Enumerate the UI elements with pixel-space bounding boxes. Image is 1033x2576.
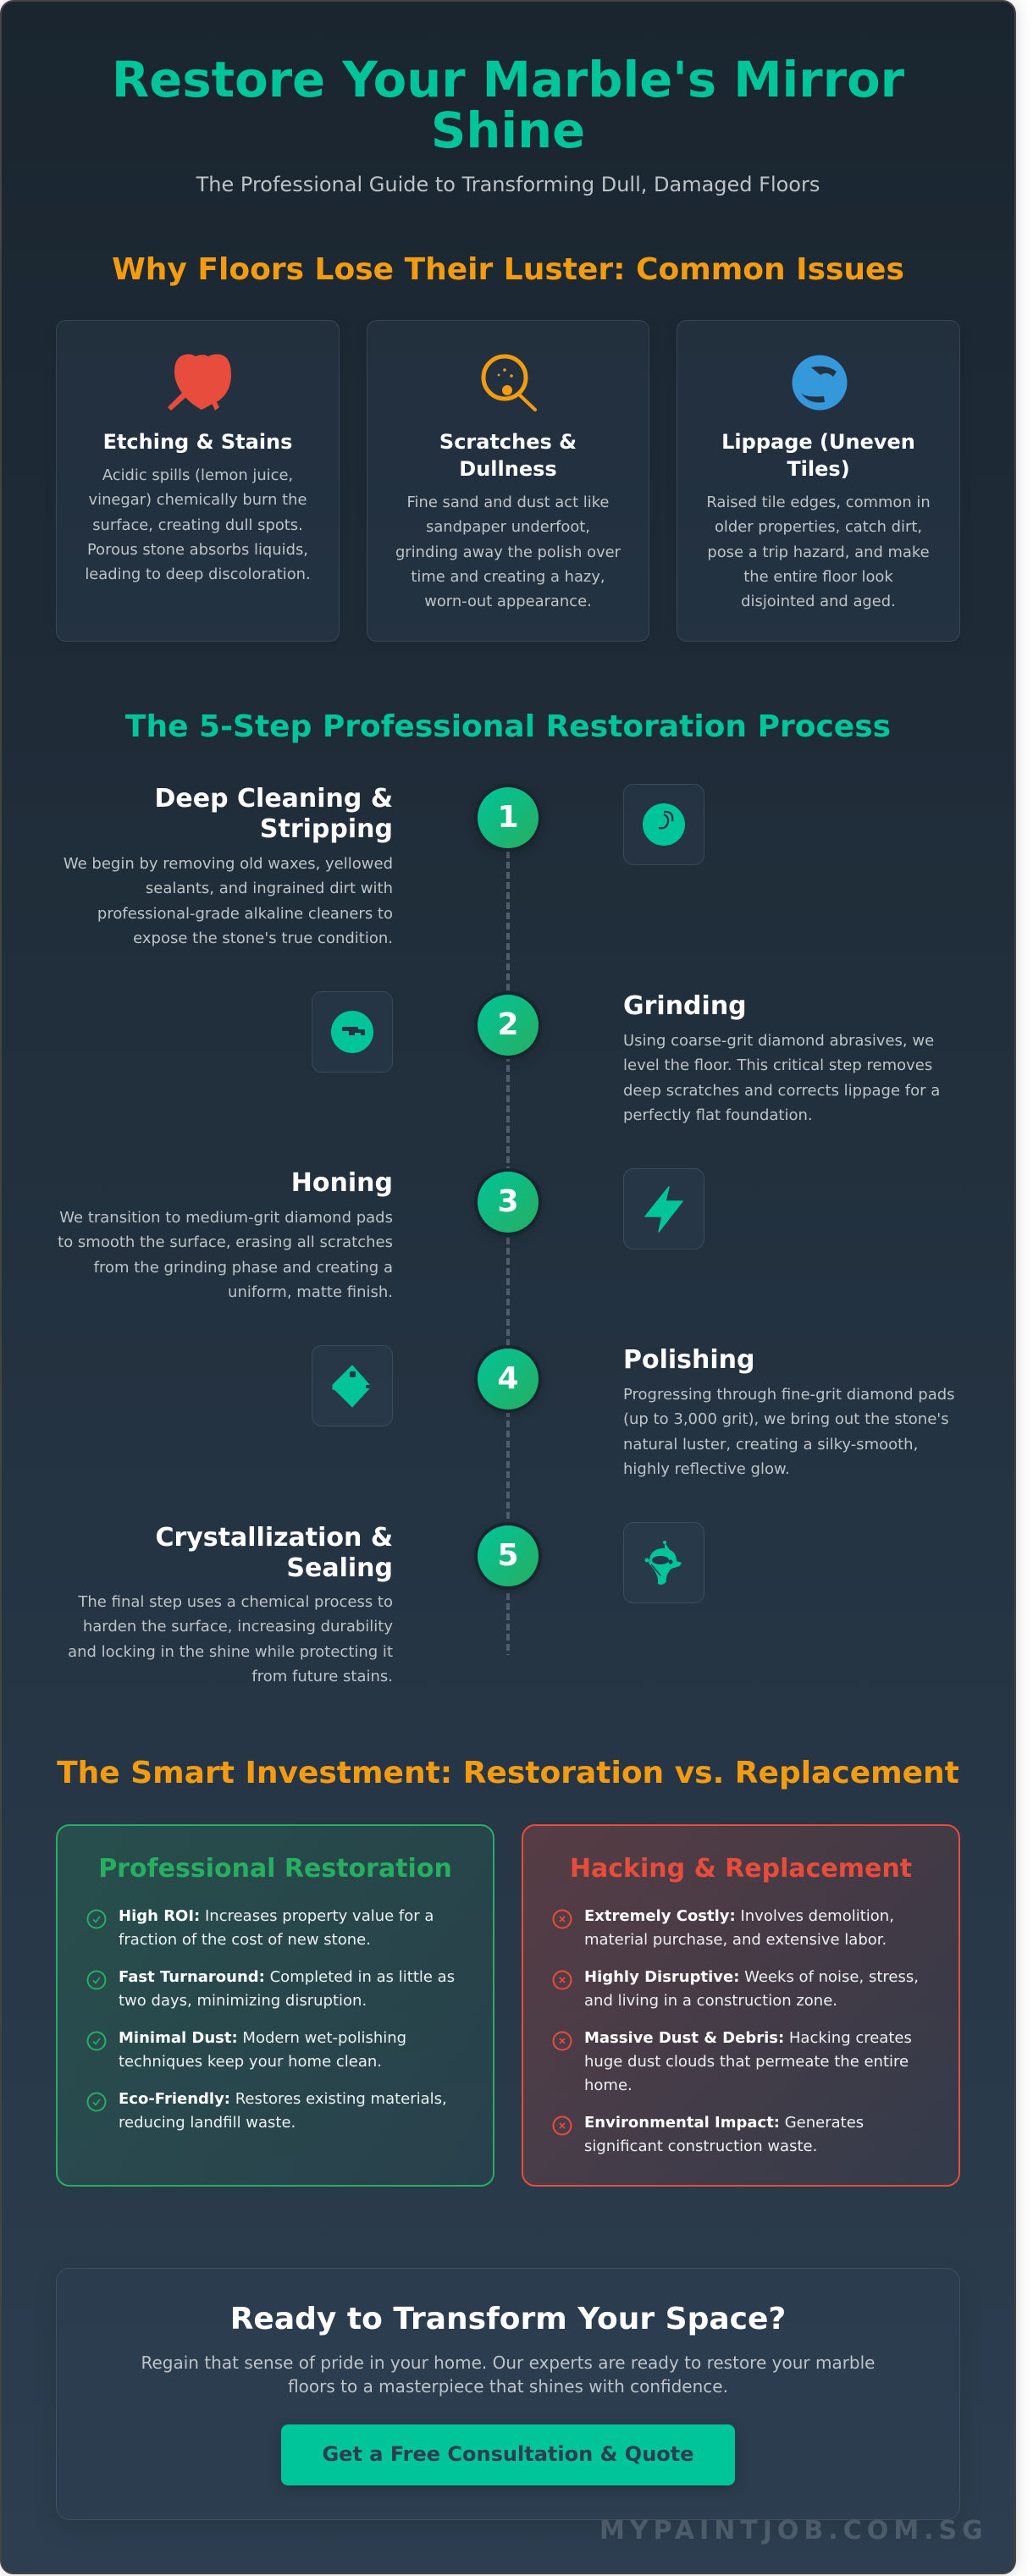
step 2 text — [623, 1032, 940, 1124]
step 4 text: natural luster, creating a silky-smooth, — [623, 1436, 918, 1453]
item: minimal dust: Minimal Dust: Modern wet-polishing — [119, 2029, 406, 2047]
check icon — [86, 2093, 107, 2111]
subtitle: The Professional Guide to Transforming Dull, Damaged Floors — [196, 173, 820, 196]
item: environmental impact: significant construction waste. — [584, 2137, 817, 2155]
step 3 number: 3 — [497, 1184, 519, 1219]
item: minimal dust: techniques keep your home clean. — [119, 2053, 382, 2071]
item: high ROI: High ROI: Increases property value for a — [119, 1907, 434, 1925]
card text — [395, 494, 621, 610]
item: environmental impact: Environmental Impact: Generates — [584, 2114, 864, 2132]
CTA text: Regain that sense of pride in your home. Our experts are ready to restore your marble — [141, 2353, 875, 2373]
item: extremely costly: Extremely Costly: Involves demolition, — [584, 1907, 894, 1925]
card text: sandpaper underfoot, — [426, 518, 590, 536]
panel: professional restoration — [56, 1824, 494, 2187]
title: Shine — [431, 102, 585, 159]
step 5 heading: Crystallization & — [155, 1523, 393, 1553]
step 1 text — [64, 855, 393, 947]
icon: cleaning — [643, 803, 685, 846]
card heading: Scratches & — [439, 430, 577, 454]
item: highly disruptive — [584, 1968, 919, 2010]
drawbacks list — [552, 1907, 919, 2155]
item: eco-friendly: reducing landfill waste. — [119, 2114, 296, 2132]
step 1 number — [478, 787, 539, 848]
item: extremely costly: material purchase, and extensive labor. — [584, 1931, 887, 1949]
cross icon — [552, 2116, 572, 2135]
item: eco-friendly: Eco-Friendly: Restores existing materials, — [119, 2090, 447, 2108]
card text: older properties, catch dirt, — [715, 518, 922, 536]
step 2 text: level the floor. This critical step removes — [623, 1056, 932, 1074]
item: massive dust: huge dust clouds that permeate the entire — [584, 2053, 909, 2071]
watermark: MYPAINTJOB.COM.SG — [599, 2516, 988, 2546]
step 5 text: and locking in the shine while protecting it — [68, 1643, 393, 1661]
title: Restore Your Marble's Mirror — [112, 52, 904, 108]
step 5 heading: Sealing — [286, 1553, 393, 1583]
cross icon — [552, 2032, 572, 2050]
item: minimal dust — [119, 2029, 406, 2071]
card heading: Lippage (Uneven — [721, 430, 915, 454]
card text: grinding away the polish over — [395, 543, 621, 561]
step 2 icon box — [312, 991, 393, 1073]
step 3 text: uniform, matte finish. — [228, 1283, 393, 1301]
icon: sealing — [645, 1541, 682, 1585]
step 4 text: (up to 3,000 grit), we bring out the stone's — [623, 1410, 949, 1428]
step 2 text: Using coarse-grit diamond abrasives, we — [623, 1032, 934, 1050]
step 1 text: expose the stone's true condition. — [133, 929, 393, 947]
step 3 text: from the grinding phase and creating a — [94, 1259, 393, 1277]
check icon — [86, 2032, 107, 2050]
check icon — [86, 1910, 107, 1928]
CTA button — [281, 2424, 735, 2485]
card text: worn-out appearance. — [424, 593, 592, 610]
step 1 icon box — [623, 784, 704, 865]
heading: investment comparison: The Smart Investment: Restoration vs. Replacement — [57, 1756, 959, 1790]
card heading: Dullness — [459, 457, 557, 481]
card heading: Tiles) — [787, 457, 850, 481]
step 3 text — [58, 1209, 393, 1301]
benefits list — [86, 1907, 455, 2132]
timeline line — [506, 852, 510, 1655]
heading: common issues: Why Floors Lose Their Luster: Common Issues — [112, 252, 904, 287]
item: eco-friendly — [119, 2090, 447, 2132]
icon: diamond — [332, 1365, 371, 1407]
step 2 text: deep scratches and corrects lippage for a — [623, 1082, 940, 1100]
step 1 heading: Deep Cleaning & — [155, 784, 393, 814]
card text: disjointed and aged. — [741, 593, 896, 610]
CTA text — [141, 2353, 875, 2397]
step 3 number — [478, 1172, 539, 1233]
item: extremely costly — [584, 1907, 894, 1949]
step 5 heading — [155, 1523, 393, 1583]
panel heading: Professional Restoration — [98, 1854, 452, 1884]
step 3 heading: Honing — [291, 1168, 393, 1198]
cross icon — [552, 1971, 572, 1989]
item: high ROI: fraction of the cost of new stone. — [119, 1931, 371, 1949]
CTA heading: Ready to Transform Your Space? — [230, 2302, 786, 2336]
step 2 text: perfectly flat foundation. — [623, 1106, 813, 1124]
item: fast turnaround — [119, 1968, 455, 2010]
step 5 text: from future stains. — [251, 1668, 393, 1685]
card heading — [439, 430, 577, 481]
item: massive dust — [584, 2029, 912, 2094]
icon: grinder — [331, 1011, 373, 1053]
CTA text: floors to a masterpiece that shines with confidence. — [288, 2376, 728, 2397]
icon: stain — [168, 354, 231, 411]
card text: Fine sand and dust act like — [407, 494, 609, 511]
icon: lightning bolt — [644, 1186, 683, 1233]
step 1 number: 1 — [497, 800, 519, 835]
card text: vinegar) chemically burn the — [89, 491, 307, 509]
panel: scratches and dullness — [367, 320, 649, 642]
cross icon — [552, 1910, 572, 1928]
step 4 number: 4 — [497, 1361, 519, 1396]
step 5 icon box — [623, 1522, 704, 1603]
item: highly disruptive: Highly Disruptive: Weeks of noise, stress, — [584, 1968, 919, 1986]
panel: lippage — [677, 320, 960, 642]
card heading: Etching & Stains — [103, 430, 292, 454]
panel heading: Hacking & Replacement — [570, 1854, 912, 1884]
step 1 heading: Stripping — [260, 814, 393, 844]
step 2 heading: Grinding — [623, 991, 747, 1021]
card text: the entire floor look — [743, 568, 893, 586]
panel: hacking and replacement — [522, 1824, 960, 2187]
item: highly disruptive: and living in a construction zone. — [584, 1992, 837, 2010]
card text — [85, 466, 311, 583]
step 4 text: Progressing through fine-grit diamond pads — [623, 1386, 955, 1404]
step 5 text: harden the surface, increasing durability — [83, 1618, 393, 1636]
step 1 heading — [155, 784, 393, 844]
CTA button: Get a Free Consultation & Quote — [322, 2442, 694, 2466]
item: massive dust: Massive Dust & Debris: Hacking creates — [584, 2029, 912, 2047]
card heading — [721, 430, 915, 481]
card text — [706, 494, 931, 610]
icon: lippage circle — [793, 356, 847, 410]
step 4 icon box — [312, 1345, 393, 1426]
item: fast turnaround: Fast Turnaround: Completed in as little as — [119, 1968, 455, 1986]
step 4 number — [478, 1349, 539, 1409]
step 1 text: We begin by removing old waxes, yellowed — [64, 855, 393, 873]
title — [112, 52, 904, 159]
card text: surface, creating dull spots. — [92, 516, 303, 534]
step 3 text: We transition to medium-grit diamond pads — [59, 1209, 393, 1227]
card text: Porous stone absorbs liquids, — [87, 541, 308, 559]
card text: Acidic spills (lemon juice, — [102, 466, 293, 484]
step 2 number — [478, 995, 539, 1056]
check icon — [86, 1971, 107, 1989]
card text: Raised tile edges, common in — [706, 494, 931, 511]
step 1 text: professional-grade alkaline cleaners to — [97, 905, 393, 923]
step 5 number — [478, 1525, 539, 1586]
step 4 heading: Polishing — [623, 1345, 755, 1375]
item: high ROI — [119, 1907, 434, 1949]
step 3 text: to smooth the surface, erasing all scratches — [58, 1233, 393, 1251]
step 5 number: 5 — [497, 1538, 519, 1573]
heading: restoration process: The 5-Step Professional Restoration Process — [125, 709, 891, 744]
item: massive dust: home. — [584, 2077, 633, 2094]
item: fast turnaround: two days, minimizing disruption. — [119, 1992, 367, 2010]
card text: leading to deep discoloration. — [85, 565, 311, 583]
card text: time and creating a hazy, — [411, 568, 605, 586]
step 5 text: The final step uses a chemical process to — [78, 1593, 393, 1611]
step 1 text: sealants, and ingrained dirt with — [146, 880, 393, 897]
step 4 text: highly reflective glow. — [623, 1460, 790, 1478]
step 2 number: 2 — [497, 1007, 519, 1042]
panel: etching and stains — [56, 320, 340, 642]
panel: call to action — [56, 2268, 960, 2520]
step 3 icon box — [623, 1168, 704, 1249]
step 5 text — [68, 1593, 393, 1685]
icon: magnifier — [481, 354, 537, 411]
item: environmental impact — [584, 2114, 864, 2155]
card text: pose a trip hazard, and make — [707, 543, 930, 561]
step 4 text — [623, 1386, 955, 1478]
